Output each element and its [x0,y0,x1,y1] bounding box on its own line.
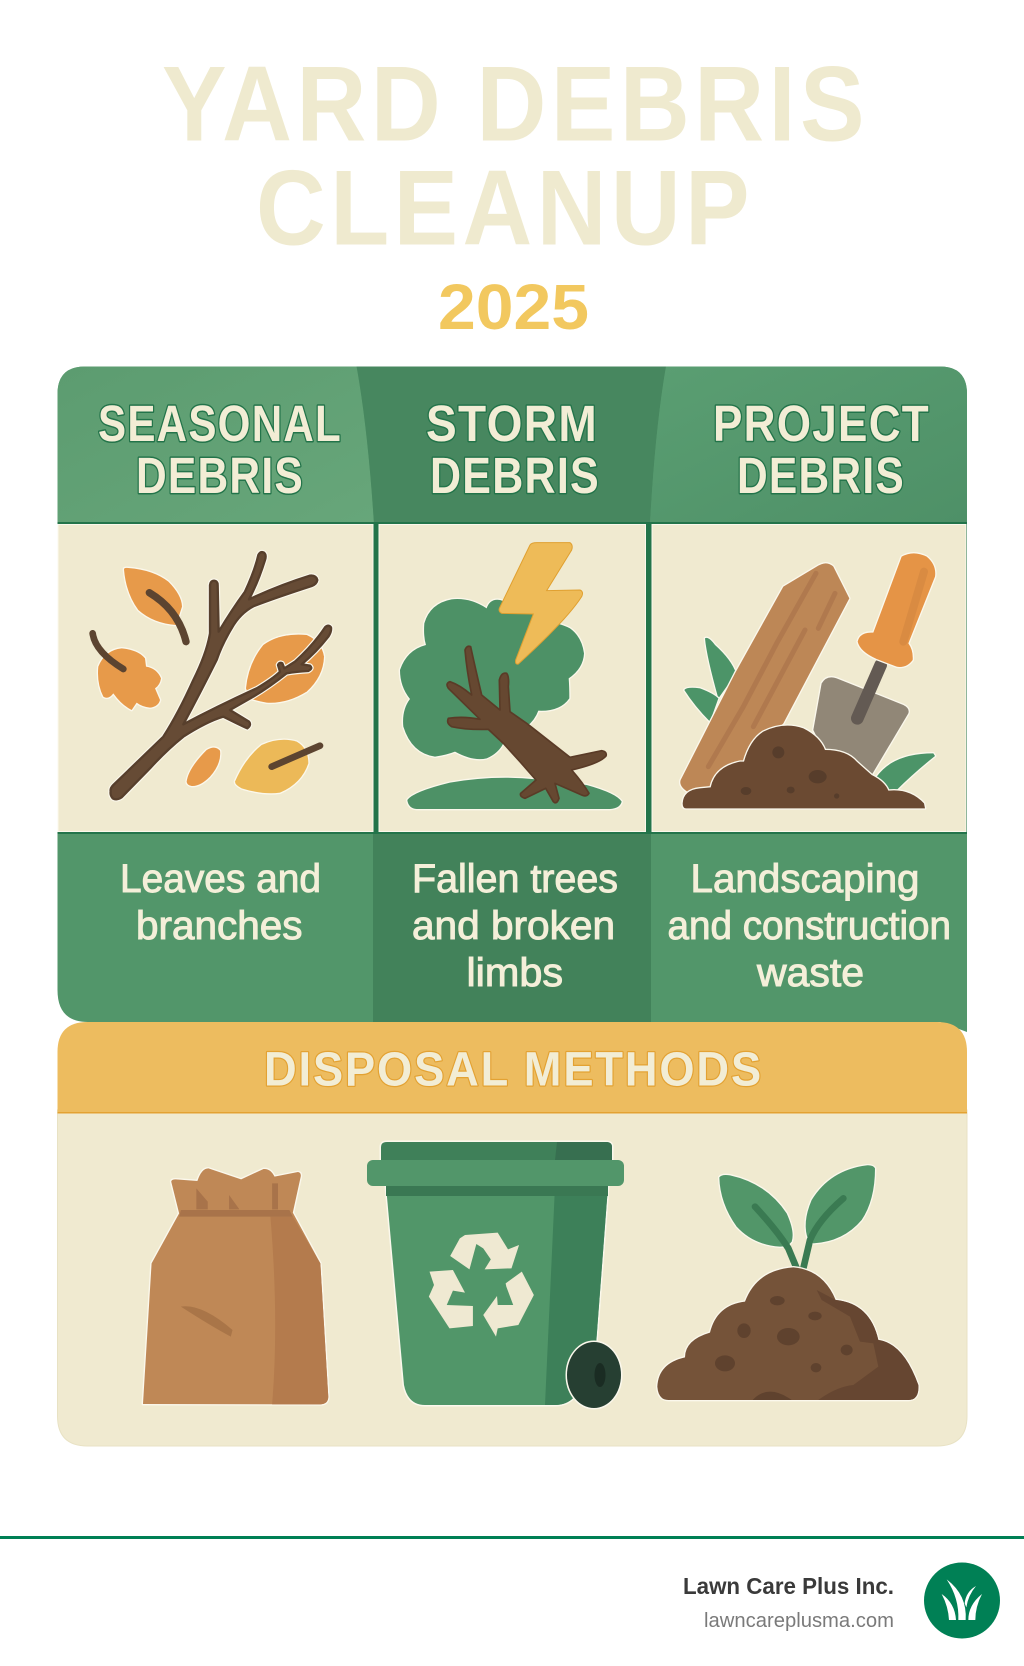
caption: storm: and broken [412,904,615,948]
header: storm debris: STORM [426,395,598,452]
title: YARD DEBRIS [162,44,869,164]
icon: plank, trowel and dirt [680,553,935,808]
caption: storm: limbs [466,951,563,995]
header: project debris: PROJECT [713,395,930,452]
heading band: DISPOSAL METHODS [264,1044,763,1096]
green panel background [58,366,967,1032]
footer company name: Lawn Care Plus Inc. [683,1573,894,1599]
recycle symbol [429,1233,534,1337]
icon: branch with leaves [93,552,331,799]
title: CLEANUP [256,148,754,268]
cell: project [652,524,966,832]
caption: project: waste [756,951,864,995]
heading band [58,1022,967,1114]
header: project debris: DEBRIS [737,447,905,504]
lower band: storm column shade [373,834,651,1022]
header: storm debris: DEBRIS [430,447,600,504]
icon: compost with seedling [657,1165,918,1400]
panel: debris types [58,366,967,1032]
footer divider [0,1536,1024,1539]
title [162,44,869,268]
logo: grass badge [924,1562,1000,1638]
caption: project: Landscaping [690,857,920,901]
caption: storm: Fallen trees [412,857,618,901]
cell: storm [379,524,646,832]
cell: seasonal [58,524,373,832]
caption: storm [412,857,618,995]
caption: project [668,857,951,995]
caption: seasonal: branches [136,904,302,948]
caption: seasonal [120,857,321,948]
year subtitle: 2025 [438,271,589,343]
header: seasonal debris [58,366,374,524]
header: storm debris [357,366,666,524]
cream body [58,1110,967,1446]
header: seasonal debris: DEBRIS [136,447,304,504]
caption: project: and construction [668,904,951,948]
header: project debris [650,366,967,524]
icon: paper bag [143,1168,328,1404]
caption: seasonal: Leaves and [120,857,321,901]
icon: fallen tree and lightning [400,543,622,809]
image band background [58,522,967,834]
header: seasonal debris: SEASONAL [98,395,342,452]
panel: disposal methods [58,1022,967,1446]
footer website: lawncareplusma.com [704,1610,894,1632]
icon: recycling bin [367,1142,624,1408]
